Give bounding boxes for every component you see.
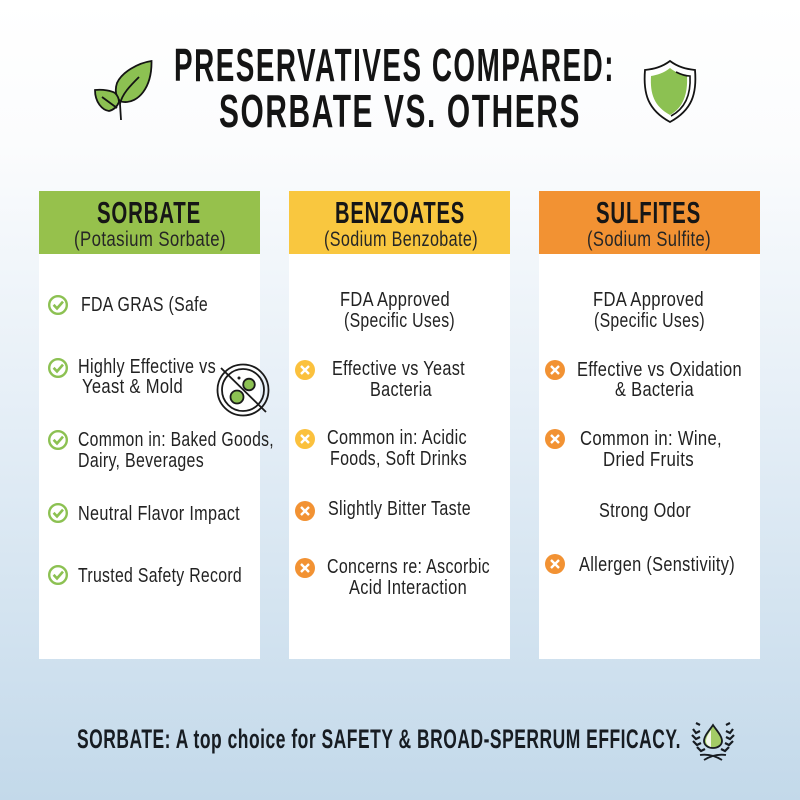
item: taste <box>295 498 471 521</box>
item: FDA GRAS: FDA GRAS (Safe <box>81 294 208 316</box>
item: effective <box>295 358 465 401</box>
item: allergen <box>545 554 735 576</box>
item: common in: Common in: Acidic <box>327 427 467 449</box>
header: sulfites: SULFITES <box>596 195 701 230</box>
icon: shield <box>645 61 695 122</box>
item: approval <box>593 289 705 332</box>
item: safety <box>49 565 242 587</box>
icon: no microbes <box>218 364 268 416</box>
item: effective: Highly Effective vs <box>78 356 216 378</box>
item: safety: Trusted Safety Record <box>78 565 242 587</box>
item: concerns <box>295 556 490 599</box>
card background <box>289 191 510 659</box>
panel: sulfites <box>539 191 760 659</box>
item: approval: FDA Approved <box>593 289 704 311</box>
item: allergen: Allergen (Senstiviity) <box>579 554 735 576</box>
item: common in: Common in: Wine, <box>580 428 722 450</box>
item: FDA GRAS <box>49 294 208 316</box>
header: sorbate: (Potasium Sorbate) <box>74 228 226 251</box>
card background <box>539 191 760 659</box>
item: effective: Effective vs Oxidation <box>577 359 742 381</box>
item: approval: (Specific Uses) <box>344 310 455 332</box>
header: benzoates: (Sodium Benzobate) <box>324 228 478 251</box>
header: sulfites <box>539 191 760 254</box>
item: concerns: Concerns re: Ascorbic <box>327 556 490 578</box>
item: approval <box>340 289 455 332</box>
item: effective: Yeast & Mold <box>82 376 183 398</box>
item: flavor: Neutral Flavor Impact <box>78 503 240 525</box>
item: common in: Dried Fruits <box>603 449 694 471</box>
header: sorbate: SORBATE <box>97 195 201 230</box>
item: common in <box>295 427 467 470</box>
title: SORBATE VS. OTHERS <box>219 85 581 137</box>
header: benzoates: BENZOATES <box>335 195 465 230</box>
icon: laurel with droplet <box>692 723 734 760</box>
item: approval: FDA Approved <box>340 289 450 311</box>
item: odor: Strong Odor <box>599 500 691 522</box>
item: taste: Slightly Bitter Taste <box>328 498 471 520</box>
header: sorbate <box>39 191 260 254</box>
header: sulfites: (Sodium Sulfite) <box>587 228 711 251</box>
item: effective: Effective vs Yeast <box>332 358 465 380</box>
item: common in: Dairy, Beverages <box>78 450 204 472</box>
icon: leaf sprout <box>95 61 152 120</box>
item: effective: Bacteria <box>370 379 432 401</box>
panel: sorbate <box>39 191 274 659</box>
item: concerns: Acid Interaction <box>349 577 467 599</box>
item: effective: & Bacteria <box>615 379 694 401</box>
item: approval: (Specific Uses) <box>594 310 705 332</box>
item: effective <box>49 356 216 398</box>
item: common in <box>49 429 274 472</box>
item: common in: Foods, Soft Drinks <box>330 448 467 470</box>
item: common in <box>545 428 722 471</box>
header: benzoates <box>289 191 510 254</box>
title <box>174 39 615 137</box>
item: common in: Common in: Baked Goods, <box>78 429 274 451</box>
panel: benzoates <box>289 191 510 659</box>
card background <box>39 191 260 659</box>
item: effective <box>545 359 742 401</box>
